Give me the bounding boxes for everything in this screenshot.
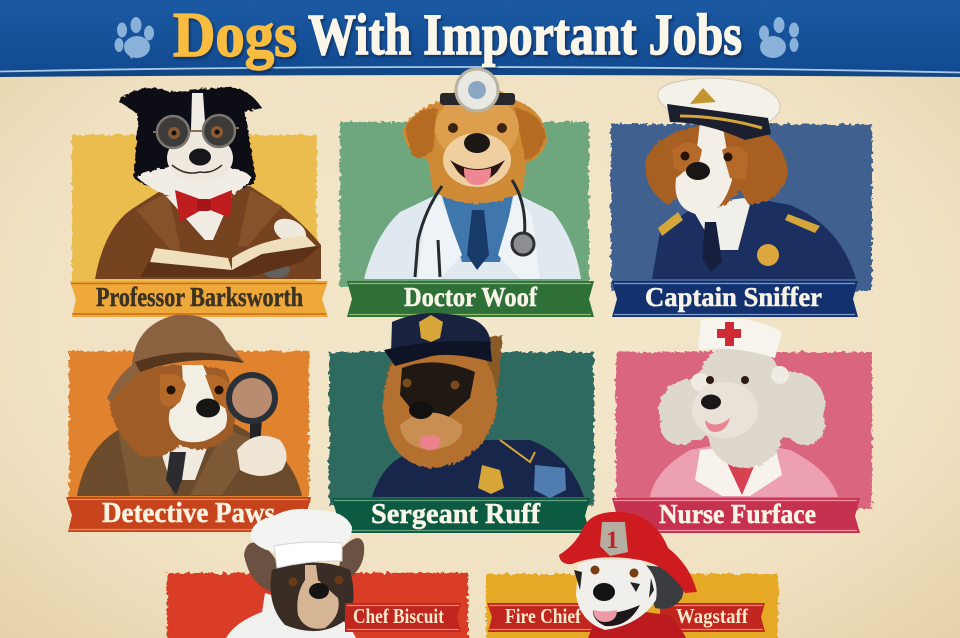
ribbon: Detective Paws: Detective Paws	[102, 498, 275, 529]
icon: right paw	[759, 17, 799, 58]
panel: Chef Biscuit	[167, 509, 468, 638]
ribbon: Nurse Furface: Nurse Furface	[659, 499, 816, 529]
dog: german shepherd sergeant	[372, 313, 584, 498]
dog: dalmatian fire chief	[559, 512, 697, 638]
ribbon: Fire Chief Wagstaff: Wagstaff	[676, 604, 749, 628]
panel: Professor Barksworth	[72, 87, 321, 287]
ribbon: Captain Sniffer: Captain Sniffer	[645, 282, 822, 312]
ribbon: Sergeant Ruff: Sergeant Ruff	[371, 499, 541, 530]
ribbon: Captain Sniffer	[612, 281, 858, 317]
dog: dalmatian fire chief: 1	[606, 527, 618, 554]
dog: french bulldog chef	[226, 509, 364, 638]
dog: poodle nurse	[650, 318, 838, 497]
title	[173, 0, 742, 70]
panel: Doctor Woof	[340, 69, 589, 287]
panel: Captain Sniffer	[611, 78, 872, 291]
title: Dogs	[173, 0, 297, 70]
ribbon: Professor Barksworth: Professor Barksworth	[96, 282, 303, 312]
ribbon: Doctor Woof: Doctor Woof	[404, 282, 538, 312]
icon: left paw	[114, 17, 154, 59]
dog: beagle captain	[645, 78, 856, 279]
dog: beagle detective	[77, 315, 302, 496]
header banner	[0, 0, 960, 77]
ribbon: Doctor Woof	[347, 281, 594, 317]
dog: golden retriever doctor	[364, 69, 581, 279]
panel: Nurse Furface	[616, 318, 872, 509]
panel: Sergeant Ruff	[329, 313, 594, 506]
panel: Fire Chief Wagstaff	[486, 512, 778, 638]
ribbon: Fire Chief Wagstaff: Fire Chief	[505, 604, 582, 628]
dog: border collie professor	[95, 87, 321, 279]
ribbon: Sergeant Ruff	[332, 498, 590, 533]
ribbon: Chef Biscuit: Chef Biscuit	[353, 604, 444, 628]
ribbon: Detective Paws	[66, 497, 311, 532]
title: With Important Jobs	[308, 2, 742, 67]
ribbon: Nurse Furface	[612, 498, 860, 533]
ribbon: Fire Chief Wagstaff	[487, 603, 765, 632]
panel: Detective Paws	[69, 315, 309, 503]
